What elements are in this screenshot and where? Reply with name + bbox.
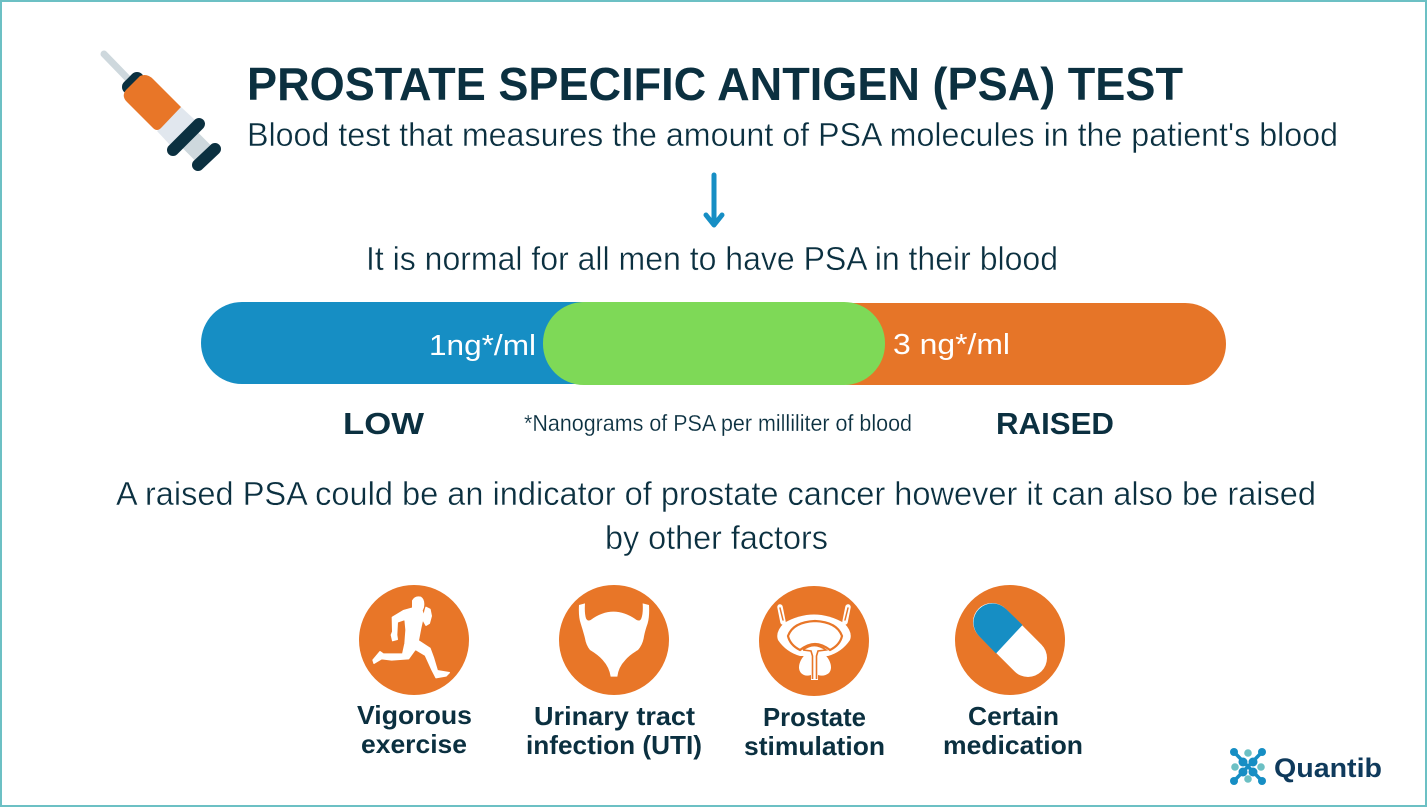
logo: Quantib — [1230, 748, 1382, 785]
subtitle: Blood test that measures the amount of PSA molecules in the patient's blood — [247, 116, 1338, 153]
icon: syringe — [104, 54, 215, 165]
inner ring — [788, 621, 842, 650]
low threshold label: 1ng*/ml — [429, 330, 536, 362]
label: low: LOW — [343, 406, 425, 441]
factor: urinary tract infection — [526, 585, 702, 760]
label — [357, 700, 472, 759]
label: raised: RAISED — [996, 406, 1114, 441]
factor: prostate stimulation — [744, 586, 885, 761]
text: raised PSA explanation — [116, 475, 1316, 556]
label — [744, 702, 885, 761]
factor: certain medication — [943, 585, 1083, 760]
bladder wall — [777, 614, 851, 656]
urethra — [803, 646, 826, 679]
label: medication — [943, 730, 1083, 760]
label: Urinary tract — [534, 701, 695, 731]
icon: runner — [359, 585, 469, 695]
PSA range bar — [201, 302, 1226, 385]
raised segment — [810, 303, 1226, 385]
label: stimulation — [744, 731, 885, 761]
label: exercise — [361, 729, 467, 759]
icon: prostate — [759, 586, 869, 696]
label — [943, 701, 1083, 760]
low segment — [201, 302, 621, 384]
text: raised PSA explanation: by other factors — [605, 519, 828, 556]
label: infection (UTI) — [526, 730, 702, 760]
raised threshold label: 3 ng*/ml — [893, 329, 1010, 361]
text: raised PSA explanation: A raised PSA could be an indicator of prostate cancer however it can also be raised — [116, 475, 1316, 512]
logo wordmark: Quantib — [1274, 753, 1382, 783]
label — [526, 701, 702, 760]
icon: bladder — [559, 585, 669, 695]
arrow: down — [706, 175, 722, 225]
label: Certain — [968, 701, 1059, 731]
text: normal PSA statement: It is normal for all men to have PSA in their blood — [366, 240, 1058, 277]
icon: pill — [955, 585, 1065, 695]
logo mark — [1230, 748, 1266, 785]
label: Vigorous — [357, 700, 472, 730]
prostate lobes — [799, 650, 831, 680]
normal segment — [543, 302, 885, 385]
title: PROSTATE SPECIFIC ANTIGEN (PSA) TEST — [247, 58, 1183, 110]
footnote: *Nanograms of PSA per milliliter of blood — [524, 410, 912, 436]
label: Prostate — [763, 702, 866, 732]
factor: vigorous exercise — [357, 585, 472, 759]
seminal horns — [780, 607, 848, 622]
